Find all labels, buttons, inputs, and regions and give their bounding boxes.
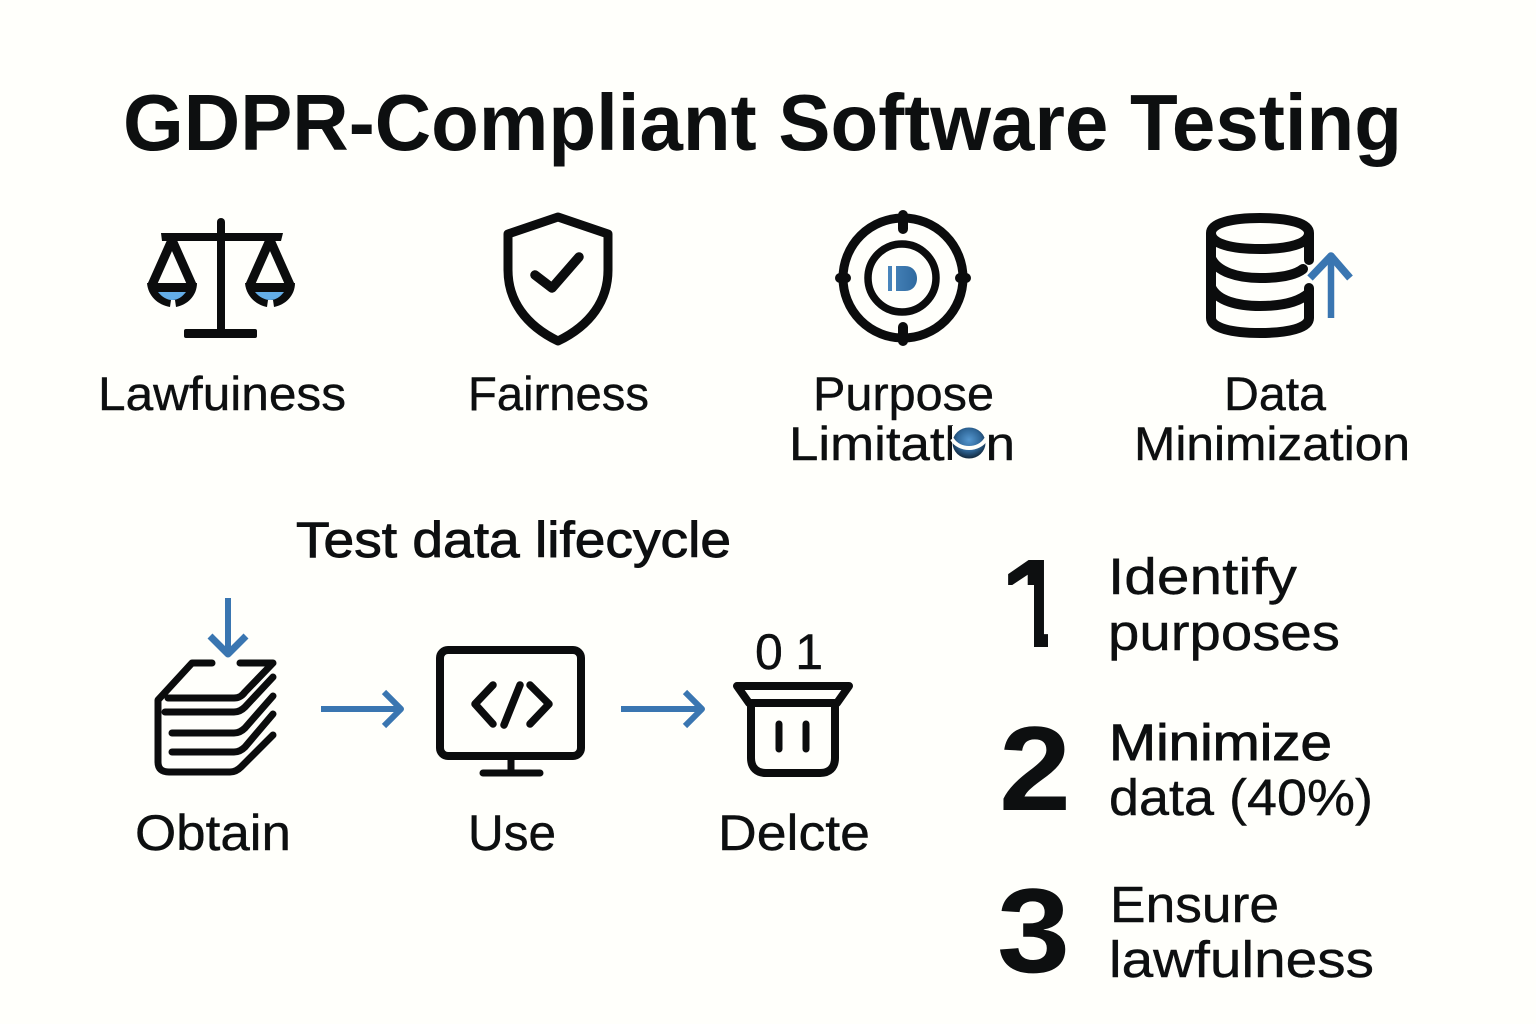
label: Obtain: Obtain [135, 805, 291, 861]
icon: scales [147, 222, 295, 338]
step 2: 2 [999, 702, 1071, 836]
panel: test data lifecycle [135, 512, 870, 861]
step 3: Ensure [1110, 876, 1279, 933]
label: Use: Use [468, 805, 556, 861]
title: GDPR-Compliant Software Testing [123, 78, 1402, 167]
label: Fairness: Fairness [468, 367, 649, 420]
heading: lifecycle: Test data lifecycle [296, 512, 731, 568]
label: Data Minimization: Minimization [1134, 417, 1410, 470]
icon: database with up arrow [1211, 218, 1350, 333]
icon: monitor with code [440, 650, 581, 773]
panel: numbered steps [1000, 556, 1372, 978]
icon: document stack with down arrow [158, 598, 273, 772]
label: Data Minimization: Data [1224, 367, 1327, 420]
label: Lawfuiness: Lawfuiness [98, 367, 346, 420]
step 2 [999, 702, 1373, 836]
step 1: purposes [1108, 604, 1340, 661]
label: Purpose Limitation: Purpose [813, 367, 994, 420]
step 2: data (40%) [1109, 769, 1373, 826]
panel: principles [98, 215, 1410, 470]
step 2: Minimize [1109, 714, 1332, 771]
arrow: obtain to use [321, 692, 401, 726]
label: Delete: Delcte [718, 805, 870, 861]
label: Purpose Limitation [789, 367, 1015, 470]
step 1: 1 [1000, 533, 1066, 674]
step 1 [1008, 556, 1338, 661]
step 3: 3 [997, 864, 1070, 998]
icon: target with ID [840, 215, 966, 341]
label: Data Minimization [1134, 367, 1410, 470]
icon: trash bin with binary: 0 1 [755, 624, 823, 680]
step 3 [997, 864, 1374, 998]
icon: blue blob over letter [952, 426, 986, 462]
step 1: Identify [1108, 548, 1298, 605]
label: Purpose Limitation: Limitatlon [789, 417, 1015, 470]
step 3: lawfulness [1109, 931, 1374, 988]
arrow: use to delete [621, 692, 702, 726]
icon: shield with check [508, 217, 608, 341]
icon: trash bin with binary [737, 624, 849, 773]
